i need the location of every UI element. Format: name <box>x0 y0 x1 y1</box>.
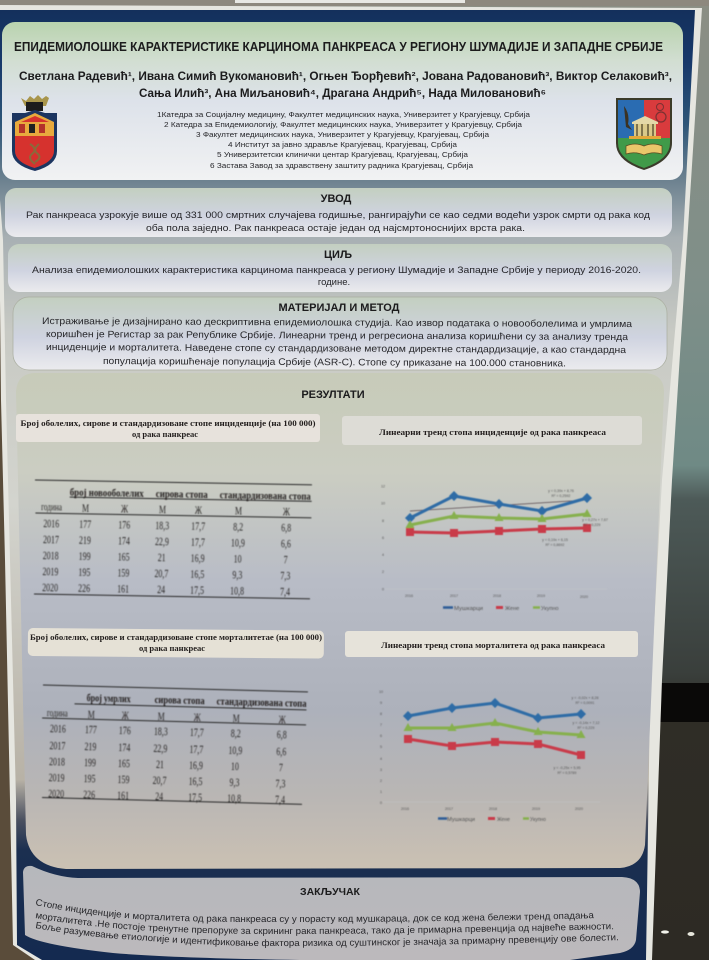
line chart: mortality trend: 0 <box>380 801 382 805</box>
label: mortality table title: од рака панкреас <box>139 643 205 653</box>
table: incidence: 9,3 <box>232 569 242 582</box>
table: mortality: 2018 <box>49 756 65 769</box>
table: incidence: М <box>159 504 166 517</box>
line chart: mortality trend: 4 <box>380 757 382 761</box>
panel: header <box>2 22 683 180</box>
table: mortality: 10 <box>231 761 239 774</box>
table: incidence: 165 <box>118 551 130 564</box>
table: mortality: 7 <box>279 762 283 775</box>
panel: results <box>16 373 664 869</box>
table: mortality: 17,5 <box>188 791 202 805</box>
table: mortality: 6,6 <box>276 746 286 759</box>
label: incidence table title <box>16 414 320 442</box>
panel: materials and method <box>13 297 667 370</box>
line chart: mortality trend: 2019 <box>532 807 540 811</box>
table: mortality: 10,9 <box>228 744 242 758</box>
table: incidence: 2016 <box>43 518 59 531</box>
table: mortality: 8,2 <box>231 727 241 741</box>
table: incidence: Ж <box>283 506 291 519</box>
table: mortality: 16,5 <box>188 775 203 789</box>
line chart: mortality trend: y = -0,02x + 8,28 <box>572 696 598 700</box>
table: incidence: М <box>82 502 89 515</box>
line chart: incidence trend: 2 <box>382 570 384 574</box>
text: conclusion: Стопе инциденције и морталитета од рака панкреаса су у порасту код мушкараца, док се код жена бележи тренд опадања <box>36 899 594 924</box>
table: mortality: 2016 <box>50 723 66 736</box>
table: incidence: 16,9 <box>191 552 205 566</box>
table: incidence: 199 <box>79 550 91 564</box>
line chart: incidence trend: y = 0,27x + 7,67 <box>582 518 608 522</box>
panel: conclusion <box>23 866 640 960</box>
table: mortality: 177 <box>85 724 97 737</box>
table: incidence: 20,7 <box>154 568 168 581</box>
table: mortality: М <box>158 711 165 724</box>
table: incidence: 2017 <box>43 534 59 547</box>
line chart: incidence trend: 4 <box>382 553 384 557</box>
table: incidence: сирова стопа <box>156 488 208 501</box>
label: incidence chart title <box>342 416 642 445</box>
table: incidence: 195 <box>78 566 90 580</box>
line chart: incidence trend: 8 <box>382 519 384 523</box>
line chart: incidence trend: Жене <box>505 606 519 612</box>
line chart: incidence trend: 2017 <box>450 594 458 598</box>
table: incidence: 7,3 <box>280 570 290 583</box>
panel: introduction <box>5 188 672 237</box>
text: introduction: оба пола заједно. Рак панкреаса остаје један од најсмртоноснијих врста рака. <box>146 223 525 234</box>
line chart: incidence trend: 2019 <box>537 594 545 598</box>
table: incidence: 16,5 <box>190 568 204 582</box>
table: incidence: 177 <box>79 518 91 532</box>
line chart: incidence trend: R² = 0,2592 <box>552 494 570 498</box>
text: materials and method: популација коришћенаје популација Србије (ASR-C). Стопе су приказане на 100.000 становника. <box>103 356 566 369</box>
label: incidence table title: од рака панкреас <box>132 429 198 439</box>
table: incidence: 6,8 <box>281 522 291 535</box>
table: mortality: 6,8 <box>277 729 287 742</box>
table: mortality <box>40 685 308 807</box>
table: mortality: М <box>232 713 240 726</box>
table: incidence: 10,8 <box>230 585 244 598</box>
line chart: incidence trend: Укупно <box>541 606 559 612</box>
heading: results: РЕЗУЛТАТИ <box>301 389 365 401</box>
line chart: incidence trend: 12 <box>381 484 385 488</box>
table: incidence: 17,7 <box>191 520 205 534</box>
table: incidence: 10,9 <box>231 537 245 550</box>
line chart: incidence trend: 2018 <box>493 594 501 598</box>
table: mortality: Ж <box>121 710 130 723</box>
line chart: mortality trend: R² = 0,229 <box>578 726 594 730</box>
table: incidence: 159 <box>117 567 129 580</box>
table: incidence: Ж <box>121 503 129 516</box>
table: mortality: стандардизована стопа <box>216 696 307 710</box>
line chart: mortality trend: R² = 0,0091 <box>576 701 594 705</box>
table: incidence <box>33 480 312 599</box>
table: mortality: 2017 <box>49 740 65 753</box>
line chart: incidence trend: 2020 <box>580 595 588 599</box>
table: incidence: број новооболелих <box>70 487 144 500</box>
table: incidence: 176 <box>118 519 130 532</box>
line chart: mortality trend: y = -0,14x + 7,12 <box>573 721 599 725</box>
table: mortality: 17,7 <box>189 743 203 757</box>
table: incidence: Ж <box>195 504 203 517</box>
table: mortality: 174 <box>118 742 130 755</box>
text: aim: Анализа епидемиолошких карактеристика карцинома панкреаса у региону Шумадије и Западне Србије у периоду 2016-2020. <box>32 265 641 276</box>
authors: Сања Илић³, Ана Миљановић⁴, Драгана Андрић⁵, Нада Миловановић⁶ <box>139 88 546 100</box>
table: incidence: 219 <box>79 534 91 548</box>
text: aim: године. <box>318 277 350 288</box>
line chart: incidence trend: 10 <box>381 502 385 506</box>
heading: aim: ЦИЉ <box>324 249 352 261</box>
text: conclusion <box>36 899 618 948</box>
affiliations: 5 Универзитетски клинички центар Крагујевац, Крагујевац, Србија <box>217 150 468 159</box>
table: incidence: година <box>41 502 62 514</box>
heading: introduction: УВОД <box>321 193 352 205</box>
line chart: mortality trend: 10 <box>379 690 383 694</box>
line chart: mortality trend: Укупно <box>530 817 546 823</box>
label: incidence table title: Број оболелих, сирове и стандардизоване стопе инциденције (на 100 000) <box>20 418 316 428</box>
line chart: mortality trend: 2020 <box>575 807 583 811</box>
table: incidence: 6,6 <box>281 538 291 551</box>
line chart: incidence trend: R² = 0,229 <box>584 523 600 527</box>
table: incidence: 8,2 <box>233 521 243 534</box>
label: mortality chart title: Линеарни тренд стопа морталитета од рака панкреаса <box>381 640 606 650</box>
table: mortality: 16,9 <box>189 759 203 773</box>
line chart: mortality trend: 7 <box>380 723 382 727</box>
affiliations: 6 Застава Завод за здравствену заштиту радника Крагујевац, Србија <box>210 161 473 170</box>
table: incidence: М <box>235 505 242 518</box>
panel: aim <box>8 244 672 292</box>
table: incidence: 7 <box>284 554 288 567</box>
table: incidence: 2019 <box>42 566 58 579</box>
text: introduction <box>26 210 650 234</box>
text: introduction: Рак панкреаса узрокује више од 331 000 смртних случајева годишње, рангирајући се као седми водећи узрок смрти од рака код <box>26 210 650 221</box>
table: mortality: 195 <box>83 773 96 786</box>
table: incidence: 17,7 <box>191 536 205 550</box>
line chart: incidence trend: 6 <box>382 536 384 540</box>
text: aim <box>32 265 641 288</box>
line chart: mortality trend: R² = 0,5789 <box>558 771 576 775</box>
table: mortality: број умрлих <box>87 692 131 705</box>
table: incidence: 18,3 <box>155 520 169 533</box>
affiliations: 4 Институт за јавно здравље Крагујевац, Крагујевац, Србија <box>228 140 457 149</box>
heading: conclusion: ЗАКЉУЧАК <box>300 886 361 898</box>
table: mortality: Ж <box>193 712 202 725</box>
label: mortality table title: Број оболелих, сирове и стандардизоване стопе морталитетае (на 100 000) <box>30 632 322 642</box>
line chart: incidence trend: y = 0,19x + 6,15 <box>542 538 568 542</box>
line chart: mortality trend: 2017 <box>445 807 453 811</box>
table: mortality: 7,4 <box>275 794 285 807</box>
label: mortality table title <box>28 628 324 659</box>
table: incidence: 17,5 <box>190 584 204 598</box>
icon: faculty crest <box>616 98 672 170</box>
authors <box>19 71 672 100</box>
line chart: mortality trend: 2 <box>380 779 382 783</box>
heading: materials and method: МАТЕРИЈАЛ И МЕТОД <box>279 302 400 314</box>
text: conclusion: Боље разумевање етиологије и идентификовање фактора ризика од суштинског је значаја за примарну превенцију ове болести. <box>36 922 618 948</box>
text: materials and method: Истраживање је дизајнирано као дескриптивна епидемиолошка студија. Као извор података о новооболелима и умрлима <box>42 316 633 330</box>
table: mortality: година <box>47 708 68 720</box>
label: incidence chart title: Линеарни тренд стопа инциденције од рака панкреаса <box>379 427 607 437</box>
line chart: incidence trend: 2016 <box>405 594 413 598</box>
table: mortality: 7,3 <box>275 778 286 791</box>
line chart: mortality trend: 5 <box>380 745 382 749</box>
table: mortality: сирова стопа <box>154 694 205 707</box>
table: incidence: 21 <box>158 552 166 565</box>
table: mortality: 199 <box>84 757 96 770</box>
table: incidence: 24 <box>157 584 165 597</box>
text: materials and method: инциденције и морталитета. Наведене стопе су стандардизоване методом директне стандардизације, а као стандардна <box>46 342 627 356</box>
line chart: mortality trend: 9 <box>380 701 382 705</box>
affiliations: 3 Факултет медицинских наука, Универзитет у Крагујевцу, Крагујевац, Србија <box>196 130 489 139</box>
text: conclusion: морталитета .Не постоје тренутне препоруке за скрининг рака панкреаса, тако да је примарна превенција од највеће важности. <box>36 913 614 936</box>
title: ЕПИДЕМИОЛОШКЕ КАРАКТЕРИСТИКЕ КАРЦИНОМА ПАНКРЕАСА У РЕГИОНУ ШУМАДИЈЕ И ЗАПАДНЕ СРБИЈЕ <box>14 40 663 54</box>
line chart: mortality trend: Жене <box>497 817 510 823</box>
table: mortality: 176 <box>119 725 131 738</box>
table: mortality: 18,3 <box>154 725 168 739</box>
line chart: mortality trend: 3 <box>380 768 382 772</box>
table: mortality: 21 <box>156 759 164 772</box>
table: mortality: Ж <box>278 714 287 727</box>
text: materials and method: коришћен је Регистар за рак Републике Србије. Линеарни тренд и регресиона анализа коришћени су за анализу тренда <box>46 329 629 343</box>
line chart: incidence trend <box>381 484 608 612</box>
table: incidence: 10 <box>234 553 242 566</box>
line chart: incidence trend: y = 0,39x + 8,76 <box>548 489 574 493</box>
table: mortality: 2020 <box>48 788 64 801</box>
table: mortality: 159 <box>117 774 130 787</box>
table: mortality: 9,3 <box>229 776 240 790</box>
line chart: mortality trend: 6 <box>380 734 382 738</box>
line chart: mortality trend: 1 <box>380 790 382 794</box>
line chart: mortality trend: Мушкарци <box>447 817 475 823</box>
line chart: mortality trend: 8 <box>380 712 382 716</box>
table: incidence: стандардизована стопа <box>220 489 311 503</box>
table: mortality: 10,8 <box>227 792 241 806</box>
line chart: mortality trend <box>379 690 600 823</box>
table: mortality: 165 <box>118 758 130 771</box>
affiliations: 1Катедра за Социјалну медицину, Факултет медицинских наука, Универзитет у Крагујевцу, Србија <box>157 110 530 119</box>
icon: city crest <box>12 95 57 171</box>
table: incidence: 2020 <box>42 582 58 595</box>
table: mortality: 20,7 <box>152 774 167 788</box>
affiliations: 2 Катедра за Епидемиологију, Факултет медицинских наука, Универзитет у Крагујевцу, Србија <box>164 120 522 129</box>
text: materials and method <box>42 316 633 369</box>
table: incidence: 7,4 <box>280 586 290 599</box>
table: incidence: 2018 <box>43 550 59 563</box>
line chart: mortality trend: y = -0,25x + 5,95 <box>554 766 580 770</box>
table: mortality: 161 <box>117 790 129 803</box>
table: mortality: М <box>88 709 95 722</box>
line chart: incidence trend: 0 <box>382 588 384 592</box>
table: mortality: 2019 <box>48 772 65 785</box>
table: mortality: 226 <box>83 789 95 802</box>
line chart: incidence trend: R² = 0,8692 <box>546 543 564 547</box>
table: mortality: 22,9 <box>153 742 167 756</box>
line chart: mortality trend: 2016 <box>401 807 409 811</box>
line chart: mortality trend: 2018 <box>489 807 497 811</box>
table: incidence: 161 <box>117 583 129 596</box>
table: incidence: 226 <box>78 582 90 596</box>
table: incidence: 174 <box>118 535 130 548</box>
table: mortality: 219 <box>84 741 96 754</box>
table: mortality: 24 <box>155 791 163 804</box>
authors: Светлана Радевић¹, Ивана Симић Вукомановић¹, Огњен Ђорђевић², Јована Радовановић³, Виктор Селаковић³, <box>19 71 672 83</box>
affiliations <box>157 110 530 170</box>
line chart: incidence trend: Мушкарци <box>454 606 483 612</box>
label: mortality chart title <box>345 631 638 657</box>
table: incidence: 22,9 <box>155 536 169 549</box>
table: mortality: 17,7 <box>190 726 204 740</box>
